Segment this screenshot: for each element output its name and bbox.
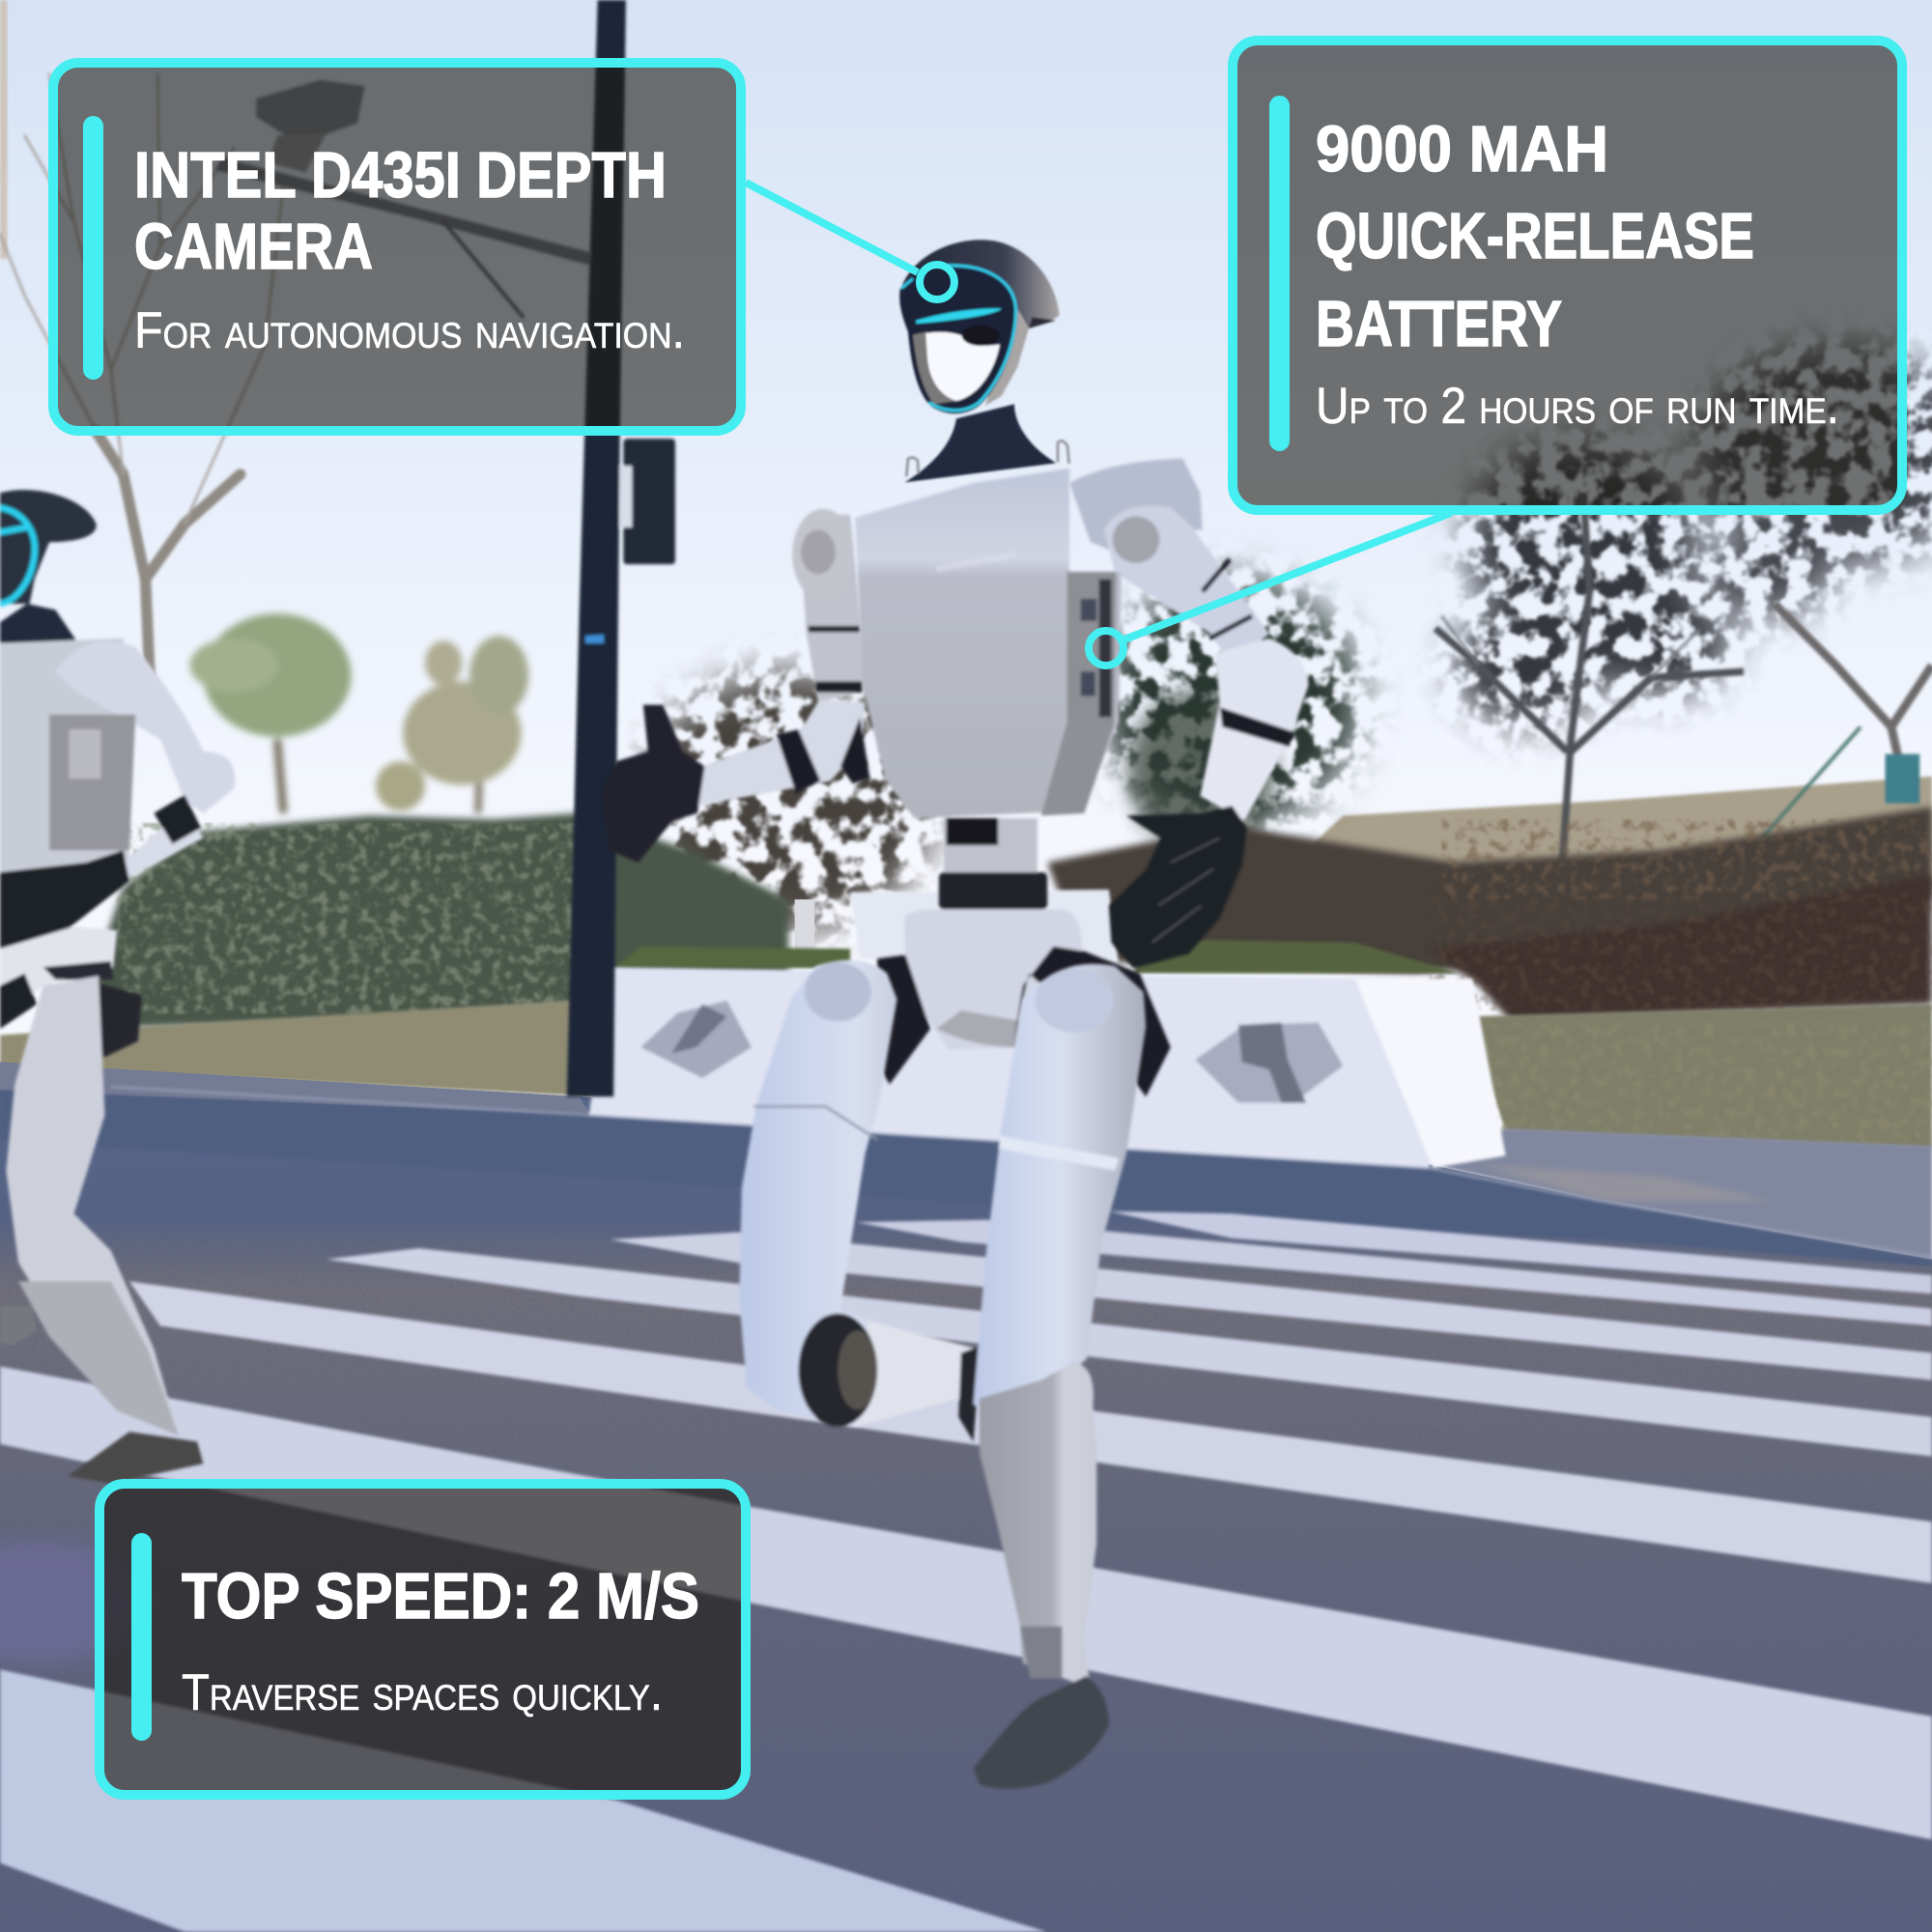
connector to camera [746,183,954,299]
accent bar [1269,96,1290,451]
crossing stripes [0,1211,1932,1932]
callout: top speed [99,1484,746,1795]
heading: battery: BATTERY [1316,288,1562,360]
main robot torso [855,469,1122,818]
main robot left arm [601,509,870,863]
heading: depth camera: INTEL D435I DEPTH [134,139,667,212]
front planter [589,967,1506,1168]
heading: battery: 9000 MAH [1316,113,1608,185]
main robot head [899,240,1069,482]
panel: top speed [99,1484,746,1795]
purple road shadow [0,1540,148,1663]
hedge [1430,875,1932,1020]
far hill [1306,777,1932,887]
accent bar [131,1533,152,1741]
description: battery: Up to 2 hours of run time. [1316,378,1839,435]
bushes left [74,813,788,1029]
tree behind arm [1103,579,1361,850]
bare tree left [0,74,283,690]
connector to battery [1089,513,1451,666]
heading: depth camera: CAMERA [134,211,373,283]
panel: battery [1233,41,1902,510]
panel: depth camera [53,63,741,431]
green tree canopies [189,613,528,813]
main robot waist and pelvis [875,818,1171,1096]
main robot right arm [1069,458,1309,969]
camera on street arm [215,157,591,265]
back planter [850,890,1119,963]
bare tree behind robot [640,671,936,949]
left robot [0,490,235,1484]
bushes right [1047,807,1932,974]
main robot legs [739,960,1146,1789]
grass [0,1001,591,1096]
tree right [1435,438,1744,863]
curb [0,1091,1932,1266]
tree far right [1694,345,1932,838]
description: top speed: Traverse spaces quickly. [182,1664,663,1721]
callout: depth camera [53,63,954,431]
road [0,1062,1932,1932]
flower beds [616,947,850,969]
heading: top speed: TOP SPEED: 2 M/S [182,1560,699,1633]
description: depth camera: For autonomous navigation. [134,302,685,359]
accent bar [83,116,103,380]
callout: battery [1089,41,1902,666]
heading: battery: QUICK-RELEASE [1316,200,1754,272]
street pole [215,0,675,1096]
